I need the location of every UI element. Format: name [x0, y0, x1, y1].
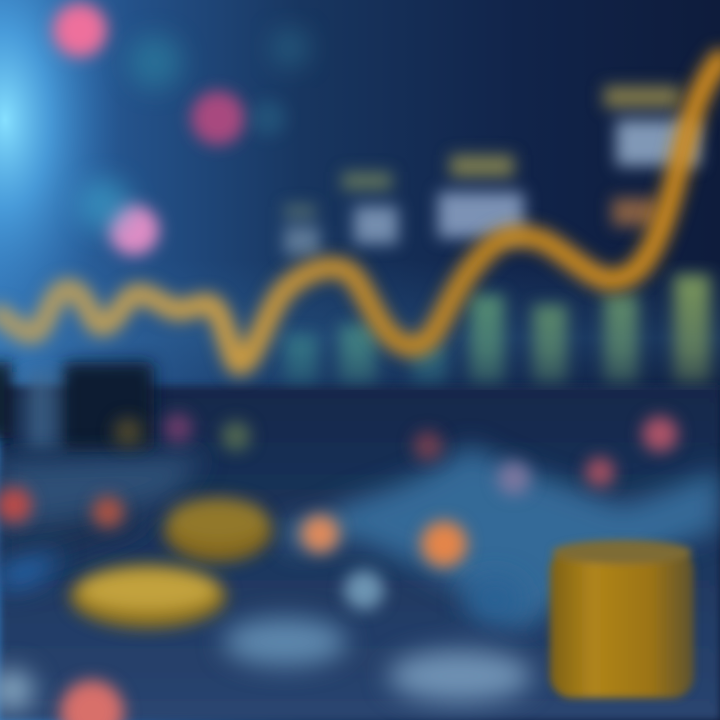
- lower bands: [0, 455, 205, 580]
- floating bar clusters: [284, 86, 700, 256]
- bokeh lights: [53, 3, 310, 255]
- growth line: [0, 60, 720, 365]
- dark left blocks: [0, 362, 154, 452]
- coin stack: [550, 540, 694, 698]
- small lights: [0, 413, 678, 720]
- bar chart: [285, 275, 710, 385]
- blue mountain chart: [0, 445, 720, 630]
- chart fragments: [0, 576, 532, 710]
- flat gold coins: [70, 498, 272, 628]
